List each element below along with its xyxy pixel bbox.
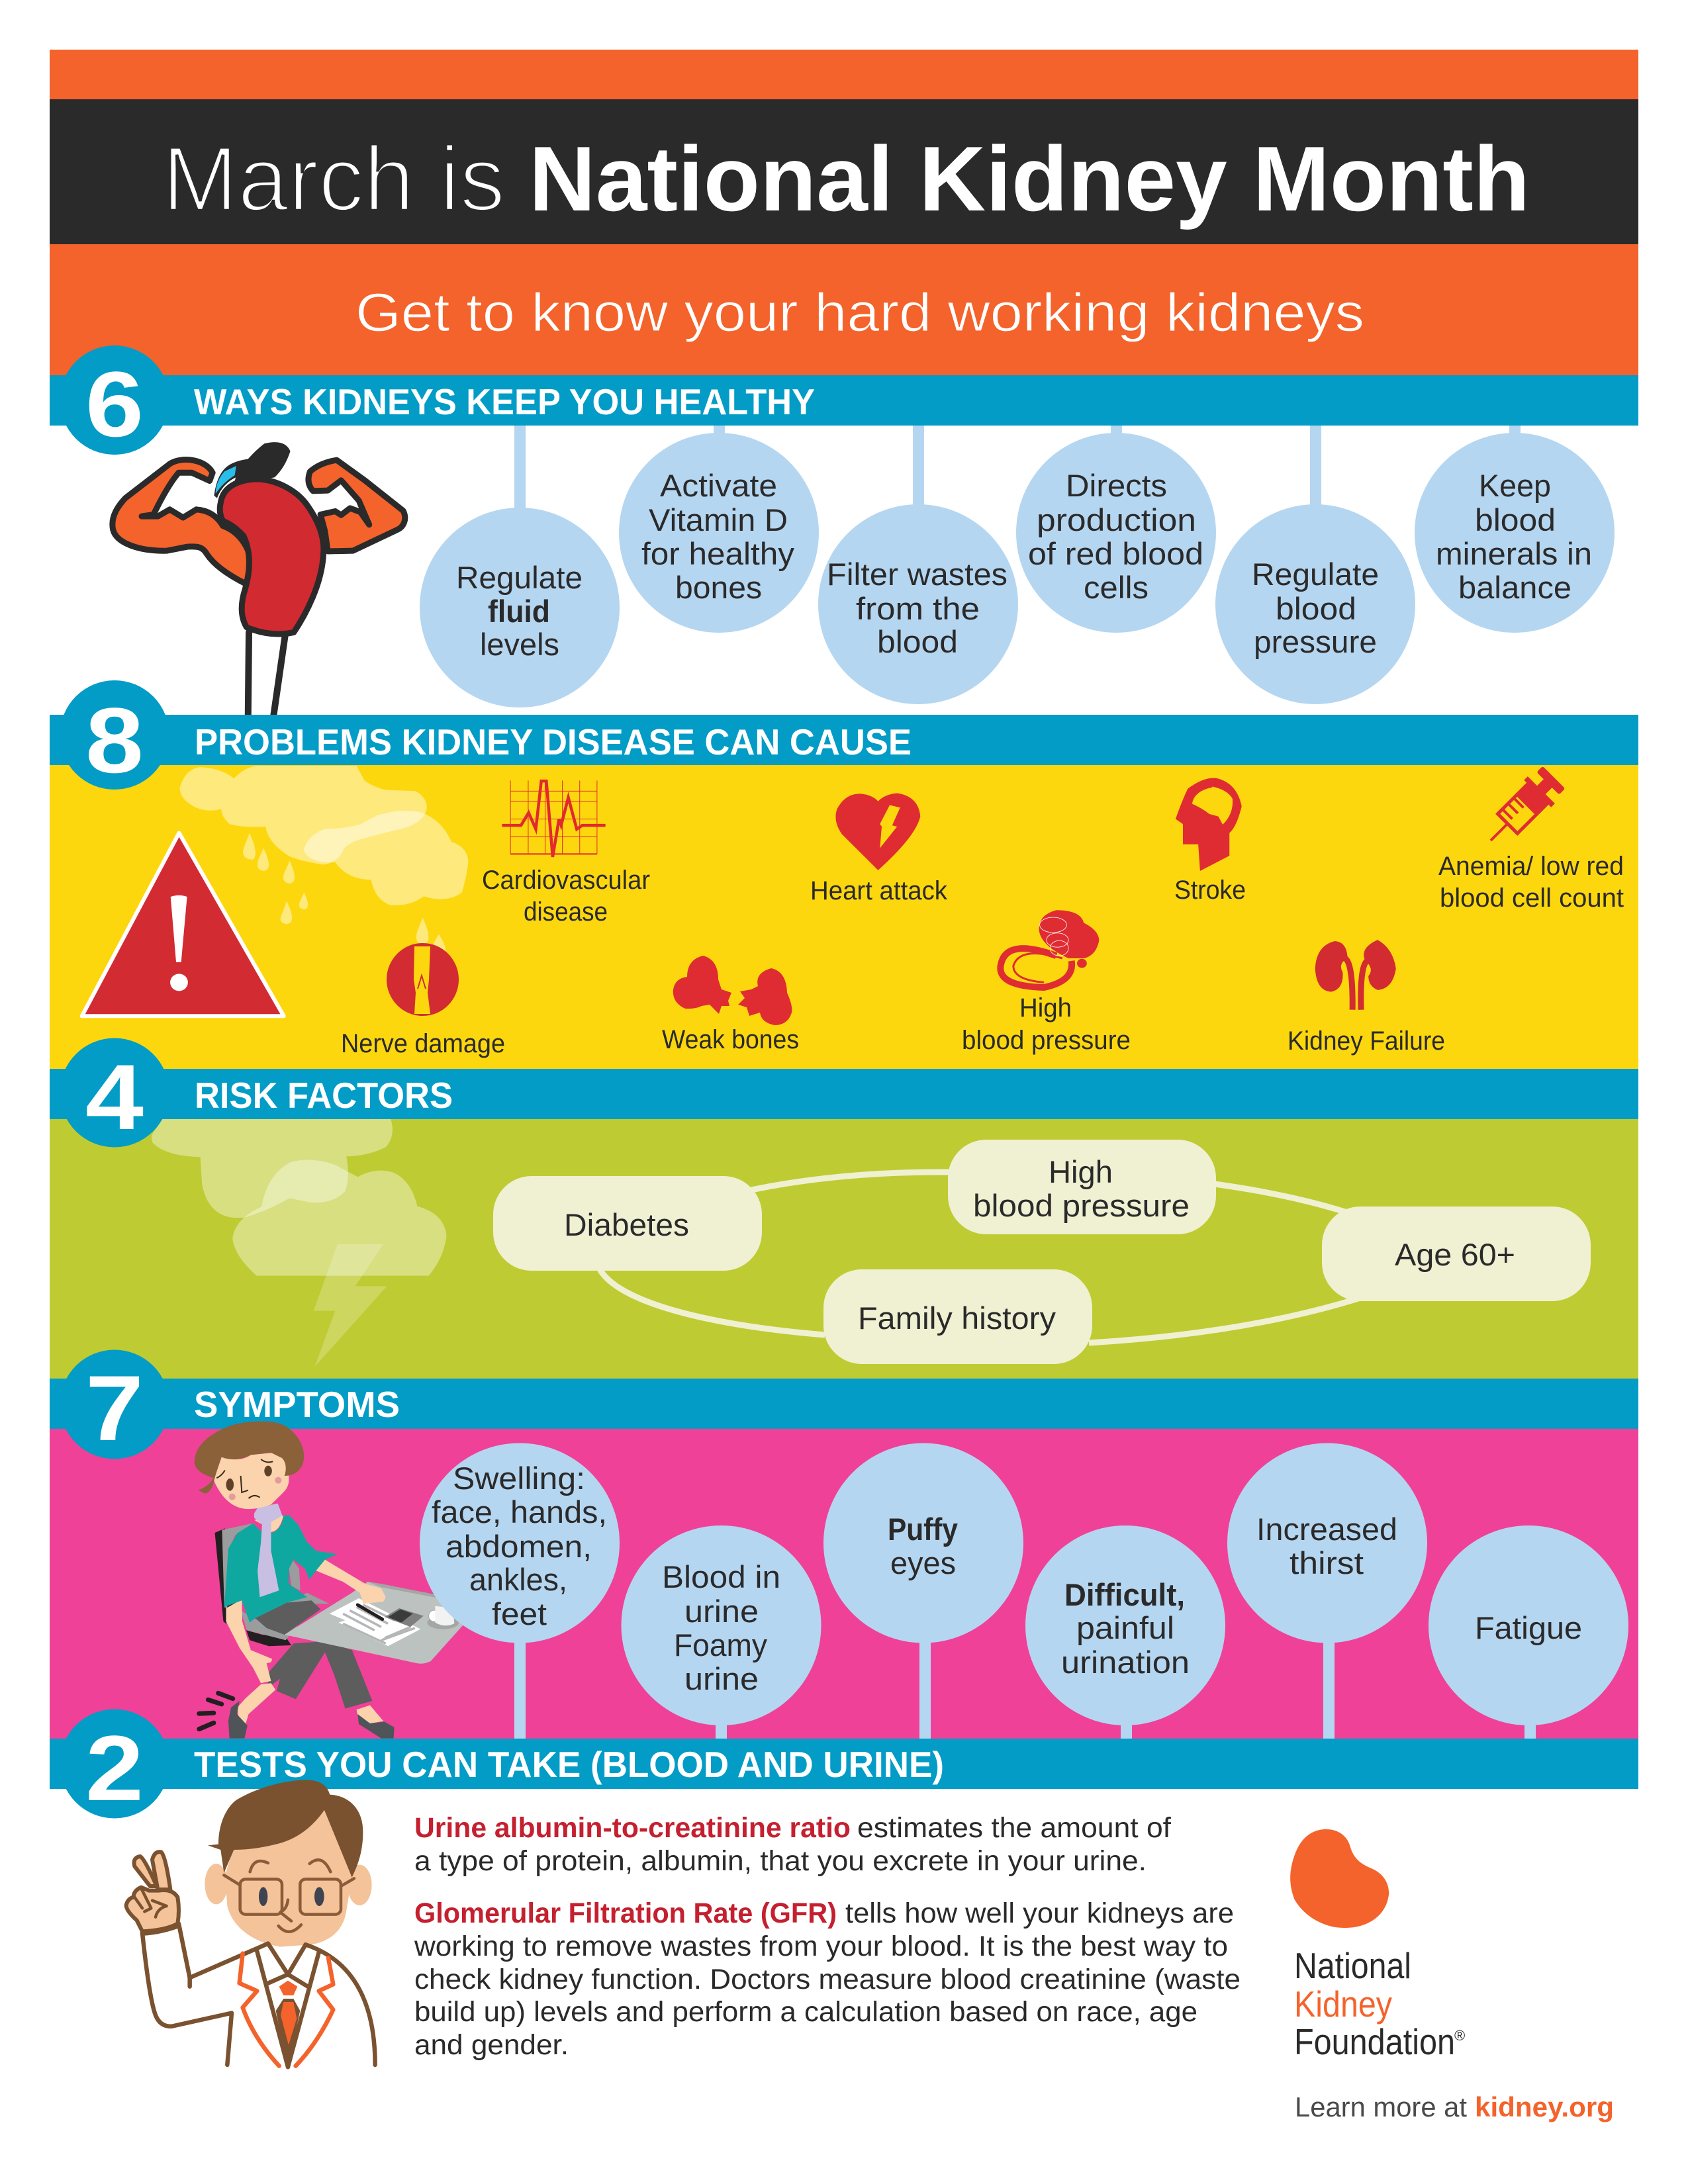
item: cardiovascular disease: Cardiovascular	[482, 866, 650, 895]
pill: family history: Family history	[858, 1300, 1056, 1336]
text: glomerular filtration rate	[414, 1897, 1241, 2061]
circle: blood in urine: urine	[684, 1594, 759, 1629]
circle: blood in urine: Foamy	[674, 1627, 767, 1662]
text: urine albumin-to-creatinine ratio: Urine albumin-to-creatinine ratio	[414, 1812, 851, 1844]
pill: family history	[823, 1269, 1092, 1364]
circle: directs production of red blood cells: Directs	[1066, 468, 1167, 503]
circle: keep blood minerals in balance	[1415, 433, 1615, 633]
item: kidney failure: Kidney Failure	[1288, 1026, 1445, 1056]
circle: fatigue	[1429, 1525, 1628, 1725]
pill: high blood pressure: High	[1049, 1154, 1113, 1189]
logo: National Kidney Foundation: Foundation	[1294, 2021, 1455, 2062]
item: kidney failure	[1288, 940, 1445, 1056]
pill: high blood pressure	[948, 1140, 1216, 1234]
icon: muscular kidney character	[113, 442, 405, 719]
stems	[514, 424, 1521, 516]
item: heart attack: Heart attack	[810, 876, 948, 905]
circle: puffy eyes: eyes	[890, 1545, 956, 1580]
circle: fatigue: Fatigue	[1475, 1610, 1582, 1645]
circle: puffy eyes	[823, 1443, 1023, 1643]
icon: warning triangle	[82, 833, 284, 1016]
logo: National Kidney Foundation: ®	[1454, 2027, 1465, 2044]
circle: difficult, painful urination	[1025, 1525, 1225, 1725]
heading band: 4 risk factors	[50, 1038, 1638, 1149]
circle: keep blood minerals in balance: minerals in	[1436, 536, 1592, 571]
panel: 8 problems kidney disease can cause	[50, 680, 1638, 1069]
circle: regulate blood pressure: pressure	[1254, 624, 1377, 659]
item: high blood pressure: High	[1019, 993, 1072, 1023]
heading band: 8 problems: PROBLEMS KIDNEY DISEASE CAN CAUSE	[195, 721, 912, 762]
circle: directs production of red blood cells: production	[1037, 502, 1196, 537]
item: anemia	[1438, 764, 1624, 913]
item: anemia: Anemia/ low red	[1438, 852, 1624, 881]
logo: National Kidney Foundation: National	[1294, 1945, 1411, 1986]
circle: activate vitamin D: Activate	[660, 468, 777, 503]
text: glomerular filtration rate: Glomerular Filtration Rate (GFR)	[414, 1897, 837, 1929]
circle: increased thirst: Increased	[1256, 1512, 1397, 1547]
item: stroke	[1174, 778, 1246, 905]
icon: kidneys	[1315, 940, 1396, 1010]
circle: keep blood minerals in balance: Keep	[1479, 468, 1551, 503]
heading band: 6 ways: 6	[85, 352, 144, 456]
circle: activate vitamin D: for healthy	[641, 536, 795, 571]
circle: swelling	[420, 1443, 620, 1643]
item: high blood pressure: blood pressure	[962, 1026, 1131, 1055]
link: learn more: Learn more at	[1295, 2091, 1467, 2122]
text: glomerular filtration rate: working to remove wastes from your blood. It is the best way to	[414, 1931, 1228, 1962]
item: high blood pressure	[962, 910, 1131, 1055]
panel: 6 ways kidneys keep you healthy	[50, 345, 1638, 719]
circle: blood in urine: urine	[684, 1661, 759, 1696]
text: glomerular filtration rate: tells how well your kidneys are	[845, 1897, 1234, 1929]
logo: National Kidney Foundation: Kidney	[1294, 1983, 1392, 2025]
circle: directs production of red blood cells: of red blood	[1028, 536, 1203, 571]
circle: keep blood minerals in balance: blood	[1475, 502, 1556, 537]
heading band: 8 problems: 8	[85, 688, 144, 792]
link: learn more	[1295, 2091, 1614, 2122]
heading band: 2 tests: 2	[85, 1716, 144, 1820]
circle: regulate blood pressure: Regulate	[1252, 557, 1379, 592]
icon: rain clouds	[180, 766, 468, 956]
pill: high blood pressure: blood pressure	[973, 1188, 1190, 1223]
icon: kidney logo	[1290, 1829, 1389, 1928]
heading band: 8 problems	[50, 680, 1638, 792]
item: heart attack	[810, 793, 948, 905]
title: National Kidney Month	[529, 128, 1530, 230]
heading band: 4 risk factors: 4	[85, 1045, 144, 1149]
circle: swelling: ankles,	[469, 1562, 567, 1597]
text: glomerular filtration rate: check kidney function. Doctors measure blood creatinine (waste	[414, 1964, 1241, 1995]
heading band: 2 tests: TESTS YOU CAN TAKE (BLOOD AND URINE)	[194, 1744, 944, 1785]
item: weak bones	[662, 956, 799, 1054]
circle: swelling: abdomen,	[445, 1529, 592, 1564]
icon: blood pressure cuff	[1000, 910, 1099, 987]
title: March is	[162, 128, 505, 230]
text: urine albumin-to-creatinine ratio: a type of protein, albumin, that you excrete in your urine.	[414, 1845, 1147, 1877]
icon: ecg grid	[502, 780, 606, 857]
circle: directs production of red blood cells	[1016, 433, 1216, 633]
heading band: 6 ways: WAYS KIDNEYS KEEP YOU HEALTHY	[194, 381, 815, 422]
circle: swelling: Swelling:	[453, 1461, 585, 1496]
panel: 7 symptoms	[50, 1350, 1638, 1739]
icon: broken bone	[673, 956, 792, 1025]
circle: activate vitamin D: Vitamin D	[649, 502, 788, 537]
icon: syringe	[1477, 764, 1568, 854]
item: nerve damage: Nerve damage	[341, 1029, 505, 1058]
circle: regulate fluid levels	[420, 508, 620, 707]
text: urine albumin-to-creatinine ratio: estimates the amount of	[857, 1812, 1172, 1844]
heading band: 7 symptoms: SYMPTOMS	[194, 1384, 400, 1425]
logo: National Kidney Foundation	[1290, 1829, 1465, 2062]
panel: 4 risk factors	[50, 1038, 1638, 1379]
text: glomerular filtration rate: and gender.	[414, 2029, 569, 2061]
circle: puffy eyes: Puffy	[888, 1512, 958, 1547]
connecting ring	[600, 1172, 1358, 1343]
illustration: woman at desk	[195, 1422, 465, 1739]
circle: keep blood minerals in balance: balance	[1458, 570, 1571, 605]
circle: swelling: face, hands,	[432, 1494, 607, 1529]
subtitle: Get to know your hard working kidneys	[355, 283, 1364, 343]
circle: regulate blood pressure	[1215, 504, 1415, 704]
circle: increased thirst: thirst	[1289, 1545, 1364, 1580]
text: urine albumin-to-creatinine ratio	[414, 1812, 1172, 1877]
item: cardiovascular disease: disease	[524, 897, 608, 927]
item: nerve damage	[341, 943, 505, 1058]
link: learn more: kidney.org	[1475, 2091, 1614, 2122]
pill: diabetes	[493, 1176, 762, 1271]
header	[50, 50, 1638, 375]
icon: storm clouds	[152, 1119, 447, 1367]
circle: regulate fluid levels: Regulate	[456, 560, 583, 595]
circle: regulate fluid levels: levels	[480, 627, 559, 662]
circle: swelling: feet	[492, 1596, 547, 1631]
circle: regulate blood pressure: blood	[1276, 591, 1356, 626]
circle: activate vitamin D: bones	[675, 570, 762, 605]
illustration: doctor	[126, 1780, 375, 2068]
circle: filter wastes	[818, 504, 1018, 704]
heading band: 2 tests	[50, 1709, 1638, 1820]
icon: head with brain	[1176, 778, 1242, 871]
circle: difficult, painful urination: painful	[1076, 1610, 1174, 1645]
item: anemia: blood cell count	[1440, 884, 1624, 913]
circle: increased thirst	[1227, 1443, 1427, 1643]
pill: diabetes: Diabetes	[564, 1207, 689, 1242]
circle: filter wastes: Filter wastes	[827, 557, 1008, 592]
circle: blood in urine: Blood in	[662, 1559, 780, 1594]
icon: broken bone disc	[387, 943, 459, 1016]
item: stroke: Stroke	[1174, 876, 1246, 905]
pill: age 60+	[1322, 1206, 1591, 1301]
circle: difficult, painful urination: urination	[1061, 1645, 1190, 1680]
circle: filter wastes: blood	[877, 624, 958, 659]
circle: activate vitamin D	[619, 433, 819, 633]
text: glomerular filtration rate: build up) levels and perform a calculation based on race, age	[414, 1996, 1197, 2028]
icon: heart with bolt	[835, 793, 920, 870]
circle: regulate fluid levels: fluid	[488, 594, 550, 629]
panel: 2 tests you can take	[50, 1709, 1638, 2122]
item: weak bones: Weak bones	[662, 1025, 799, 1054]
heading band: 4 risk factors: RISK FACTORS	[195, 1075, 453, 1116]
circle: blood in urine	[621, 1525, 821, 1725]
circle: difficult, painful urination: Difficult,	[1064, 1577, 1185, 1612]
circle: directs production of red blood cells: cells	[1084, 570, 1149, 605]
stems	[514, 1635, 1536, 1739]
pill: age 60+: Age 60+	[1395, 1237, 1515, 1272]
heading band: 6 ways	[50, 345, 1638, 456]
item: cardiovascular disease	[482, 780, 650, 927]
heading band: 7 symptoms	[50, 1350, 1638, 1460]
heading band: 7 symptoms: 7	[85, 1356, 144, 1460]
circle: filter wastes: from the	[856, 591, 980, 626]
